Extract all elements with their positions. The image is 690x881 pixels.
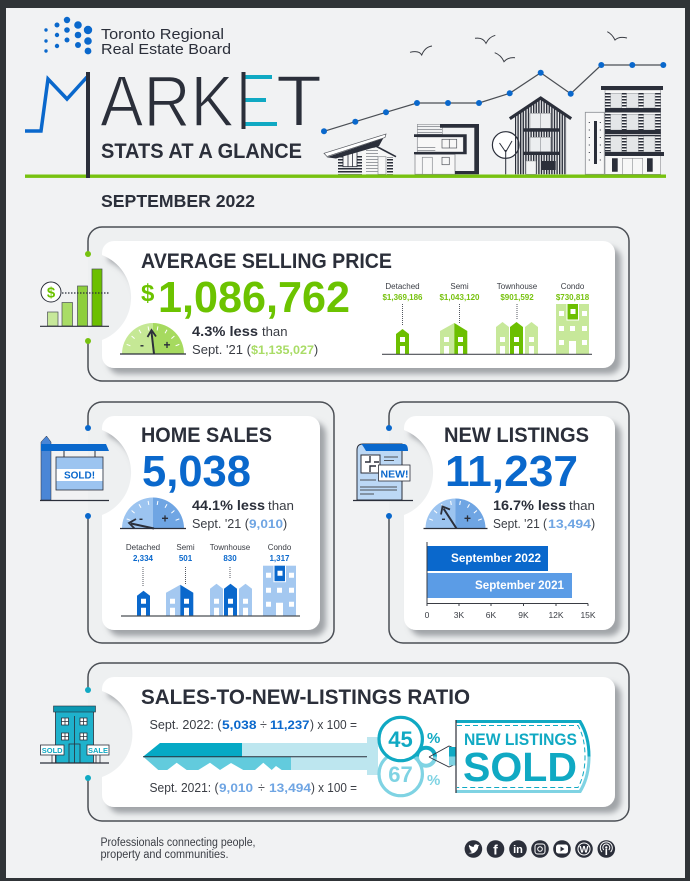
- change text: $1,135,027: [251, 343, 314, 357]
- heading: SALES-TO-NEW-LISTINGS RATIO: [141, 686, 470, 709]
- icon: rising bars with dollar: [40, 269, 109, 326]
- big number: 5,038: [142, 447, 251, 496]
- icon: condo with sold and sale signs: SALE: [88, 746, 108, 755]
- change text: [493, 498, 595, 531]
- icon: new listing document: [353, 444, 413, 500]
- panel: average selling price: [40, 227, 629, 381]
- icon: youtube: [553, 840, 571, 858]
- big number: 1,086,762: [158, 273, 350, 322]
- formula 2022: 11,237: [270, 718, 310, 732]
- housing type prices: $901,592: [500, 293, 534, 302]
- bar chart: 6K: [486, 610, 497, 620]
- gauge: +: [161, 512, 169, 526]
- icon: linkedin: in: [513, 844, 523, 856]
- change text: Sept. '21 (: [192, 343, 252, 357]
- apartment building: [585, 86, 664, 174]
- housing type prices: $1,043,120: [439, 293, 480, 302]
- logo dots: [44, 17, 92, 54]
- change text: 4.3% less: [192, 324, 258, 339]
- icon: wordpress: [575, 840, 593, 858]
- sold tag: SOLD: [463, 744, 577, 790]
- bar chart: September 2022: [451, 553, 541, 565]
- big number: $: [141, 280, 155, 307]
- heading: NEW LISTINGS: [444, 424, 589, 447]
- house 2: [414, 124, 479, 174]
- gauge: [120, 323, 186, 354]
- change text: 44.1% less: [192, 498, 265, 513]
- footer tagline: property and communities.: [100, 849, 228, 861]
- formula 2021: 13,494: [269, 781, 311, 795]
- formula 2022: ) x 100 =: [310, 718, 357, 732]
- housing type sales: 501: [179, 554, 193, 563]
- gauge: -: [140, 338, 144, 352]
- bar chart: September 2021: [475, 580, 565, 592]
- gauge: +: [464, 512, 471, 526]
- bar chart: 9K: [518, 610, 529, 620]
- subtitle: STATS AT A GLANCE: [101, 140, 302, 163]
- bar chart: [425, 542, 596, 620]
- icon: facebook: f: [493, 842, 498, 858]
- change text: than: [262, 325, 288, 339]
- housing type sales: Detached: [126, 543, 160, 552]
- housing type sales: 830: [223, 554, 237, 563]
- housing type sales: Semi: [176, 543, 195, 552]
- icon: sold sign: [40, 436, 109, 500]
- housing type sales: 1,317: [269, 554, 290, 563]
- birds: [410, 32, 627, 62]
- change text: 16.7% less: [493, 498, 566, 513]
- ratio 2022: [379, 717, 440, 761]
- ratio 2021: %: [427, 772, 440, 789]
- formula 2022: Sept. 2022: (: [150, 718, 222, 732]
- change text: ): [591, 517, 595, 531]
- formula 2022: 5,038: [222, 718, 257, 732]
- change text: than: [268, 499, 294, 513]
- formula 2021: 9,010: [219, 781, 253, 795]
- social icons: [465, 840, 615, 858]
- title: Market: [25, 62, 322, 178]
- housing type prices: Condo: [561, 282, 585, 291]
- gauge: [424, 498, 488, 528]
- formula 2021: ) x 100 =: [311, 781, 357, 795]
- big number: 11,237: [445, 447, 578, 496]
- gauge: [120, 498, 186, 528]
- date heading: SEPTEMBER 2022: [101, 191, 255, 211]
- icon: rising bars with dollar: $: [47, 284, 56, 302]
- heading: HOME SALES: [141, 424, 272, 447]
- icon: podcast: [598, 840, 615, 858]
- change text: [192, 324, 318, 357]
- bar chart: 3K: [454, 610, 465, 620]
- formula 2021: [150, 781, 357, 795]
- ratio 2021: 67: [388, 762, 413, 787]
- ratio 2021: [379, 752, 440, 796]
- sold tag: [429, 720, 590, 793]
- icon: instagram: [531, 840, 549, 858]
- change text: 13,494: [548, 517, 591, 531]
- logo wordmark: [101, 26, 231, 58]
- ratio 2022: 45: [388, 727, 413, 752]
- icon: sold sign: SOLD!: [64, 470, 95, 482]
- icon: twitter: [465, 840, 482, 858]
- logo wordmark: Real Estate Board: [101, 41, 231, 58]
- housing type prices: Townhouse: [497, 282, 538, 291]
- footer tagline: Professionals connecting people,: [100, 837, 256, 849]
- housing type prices: Detached: [385, 282, 420, 291]
- panel: new listings: [353, 402, 629, 643]
- icon: linkedin: [509, 840, 527, 858]
- gauge: -: [139, 512, 143, 526]
- icon: condo with sold and sale signs: SOLD: [42, 746, 63, 755]
- change text: than: [569, 499, 595, 513]
- formula 2022: ÷: [260, 718, 267, 732]
- housing type prices: [382, 282, 592, 354]
- house 3: [510, 98, 571, 174]
- icon: facebook: [487, 840, 504, 858]
- change text: [192, 498, 294, 531]
- line chart: [321, 62, 666, 134]
- icon: condo with sold and sale signs: [40, 706, 109, 763]
- housing type prices: $1,369,186: [382, 293, 423, 302]
- house 1: [324, 134, 396, 174]
- letter E: [242, 72, 277, 129]
- header skyline illustration: [321, 32, 666, 174]
- gauge: +: [163, 338, 171, 352]
- change text: ): [283, 517, 287, 531]
- bar chart: 12K: [548, 610, 564, 620]
- bar chart: 0: [425, 610, 430, 620]
- sold tag: NEW LISTINGS: [464, 730, 577, 749]
- gauge: -: [442, 512, 446, 526]
- formula 2021: Sept. 2021: (: [150, 781, 219, 795]
- ring connector: [417, 748, 435, 757]
- heading: AVERAGE SELLING PRICE: [141, 250, 392, 273]
- ratio 2022: %: [427, 730, 440, 747]
- formula 2021: ÷: [258, 781, 265, 795]
- housing type sales: Townhouse: [210, 543, 251, 552]
- housing type sales: [121, 543, 300, 616]
- panel: home sales: [40, 402, 334, 643]
- housing type prices: $730,818: [556, 293, 590, 302]
- M drawn as a chart line: [25, 72, 90, 178]
- housing type sales: 2,334: [133, 554, 154, 563]
- logo wordmark: Toronto Regional: [101, 26, 224, 43]
- change text: Sept. '21 (: [192, 517, 250, 531]
- key graphic: [143, 717, 440, 796]
- panel: sales-to-new-listings ratio: [40, 663, 629, 821]
- housing type prices: Semi: [450, 282, 469, 291]
- bar chart: 15K: [580, 610, 596, 620]
- footer tagline: [100, 837, 256, 861]
- change text: ): [314, 343, 318, 357]
- icon: wordpress: W: [580, 844, 589, 856]
- housing type sales: Condo: [268, 543, 292, 552]
- change text: 9,010: [249, 517, 283, 531]
- logo: [44, 17, 231, 58]
- letter T: T: [276, 62, 322, 142]
- icon: new listing document: NEW!: [380, 468, 408, 480]
- formula 2022: [150, 718, 357, 732]
- letters ARK: ARK: [100, 62, 234, 142]
- change text: Sept. '21 (: [493, 517, 548, 531]
- tree: [492, 132, 519, 174]
